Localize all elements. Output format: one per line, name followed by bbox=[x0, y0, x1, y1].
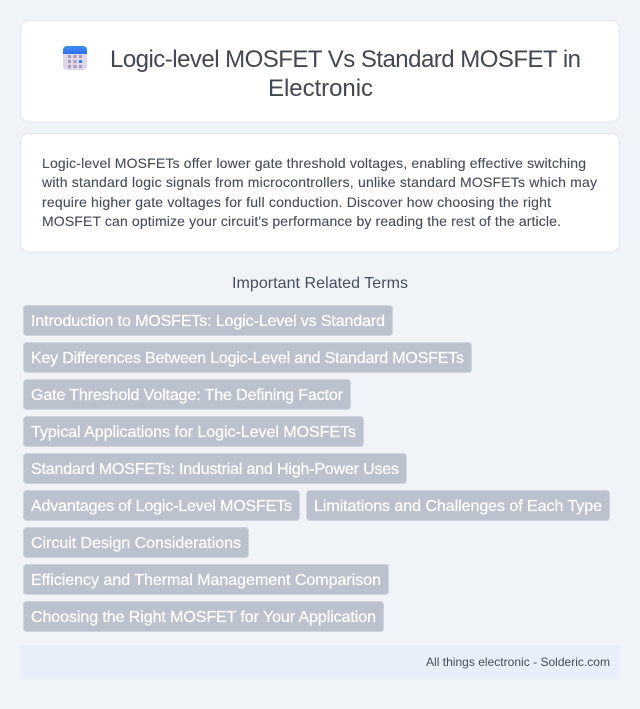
tag: limitations bbox=[306, 490, 610, 520]
tag: typical applications: Typical Applications for Logic-Level MOSFETs bbox=[31, 424, 356, 441]
tag: standard mosfets bbox=[24, 454, 406, 484]
panel: related terms tags bbox=[24, 306, 610, 632]
tag: efficiency: Efficiency and Thermal Management Comparison bbox=[31, 572, 381, 589]
heading: related terms: Important Related Terms bbox=[232, 275, 408, 292]
text block: intro paragraph: MOSFET can optimize your circuit's performance by reading the rest of the article. bbox=[42, 213, 561, 229]
title: Logic-level MOSFET Vs Standard MOSFET in bbox=[110, 46, 581, 73]
tag: limitations: Limitations and Challenges of Each Type bbox=[314, 498, 602, 515]
footer bbox=[20, 645, 620, 679]
panel: title header bbox=[20, 20, 620, 122]
title: Electronic bbox=[268, 75, 373, 102]
text block: intro paragraph: Logic-level MOSFETs offer lower gate threshold voltages, enabling effective switching bbox=[42, 155, 586, 171]
tag: choosing bbox=[24, 602, 384, 632]
tag: circuit design: Circuit Design Considerations bbox=[31, 535, 241, 552]
tag: choosing: Choosing the Right MOSFET for Your Application bbox=[31, 609, 376, 626]
icon: calendar bbox=[63, 46, 87, 70]
tag: introduction: Introduction to MOSFETs: Logic-Level vs Standard bbox=[31, 313, 385, 330]
tag: standard mosfets: Standard MOSFETs: Industrial and High-Power Uses bbox=[31, 461, 399, 478]
tag: circuit design bbox=[24, 528, 248, 558]
tag: advantages bbox=[24, 490, 300, 520]
tag: key differences: Key Differences Between Logic-Level and Standard MOSFETs bbox=[31, 350, 464, 367]
footer: All things electronic - Solderic.com bbox=[426, 655, 610, 669]
tag: introduction bbox=[24, 306, 392, 336]
panel: description bbox=[20, 134, 620, 252]
tag: gate threshold bbox=[24, 380, 350, 410]
tag: key differences bbox=[24, 342, 472, 372]
tag: advantages: Advantages of Logic-Level MOSFETs bbox=[31, 498, 292, 515]
tag: gate threshold: Gate Threshold Voltage: The Defining Factor bbox=[31, 387, 344, 404]
text block: intro paragraph: with standard logic signals from microcontrollers, unlike standard MOSFETs which may bbox=[41, 174, 597, 190]
tag: typical applications bbox=[24, 416, 364, 446]
tag: efficiency bbox=[24, 564, 388, 594]
text block: intro paragraph: require higher gate voltages for full conduction. Discover how choosing the right bbox=[42, 194, 551, 210]
